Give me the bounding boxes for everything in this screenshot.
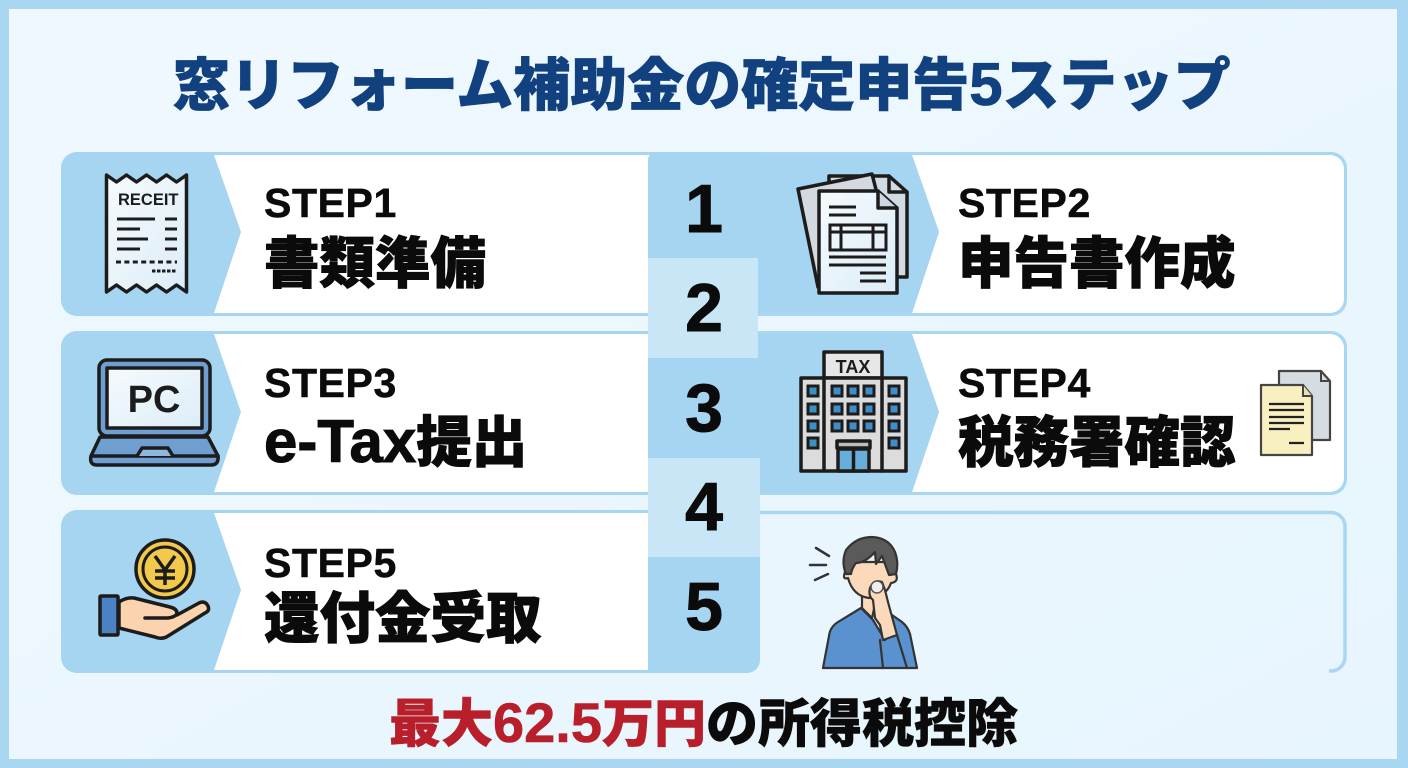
icon: receipt	[106, 175, 186, 292]
panel: step 4	[750, 331, 1347, 495]
step label: STEP3	[264, 360, 397, 406]
number 3: 3	[685, 370, 723, 446]
footer: tax deduction message: 最大62.5万円の所得税控除	[389, 691, 1018, 754]
icon: thinking person	[810, 537, 917, 668]
step label: STEP4	[958, 360, 1091, 406]
panel: step 2	[750, 152, 1347, 316]
number column	[648, 152, 760, 673]
icon: receipt: RECEIT	[118, 191, 179, 209]
title: 窓リフォーム補助金の確定申告5ステップ	[173, 51, 1231, 118]
panel: step 1	[61, 152, 660, 316]
panel: empty box with thinking person	[760, 512, 1345, 671]
panel: step 5	[61, 510, 660, 673]
step name: 還付金受取	[264, 588, 542, 650]
number 5: 5	[685, 569, 723, 645]
step label: STEP1	[264, 180, 397, 226]
icon: tax office building: TAX	[836, 357, 870, 377]
number 1: 1	[685, 171, 723, 247]
icon: documents	[798, 174, 907, 293]
number 2: 2	[685, 270, 723, 346]
step label: STEP2	[958, 180, 1091, 226]
step name: 申告書作成	[958, 233, 1236, 295]
icon: laptop: PC	[128, 379, 180, 421]
panel: step 3	[61, 331, 660, 495]
step name: e-Tax提出	[264, 408, 527, 475]
icon: paper documents	[1261, 371, 1330, 455]
icon: tax office building	[801, 352, 906, 471]
step name: 書類準備	[264, 233, 486, 295]
number 4: 4	[685, 469, 723, 545]
icon: yen coin on hand	[100, 540, 209, 638]
icon: laptop	[91, 360, 218, 465]
step label: STEP5	[264, 540, 397, 586]
step name: 税務署確認	[958, 412, 1236, 474]
